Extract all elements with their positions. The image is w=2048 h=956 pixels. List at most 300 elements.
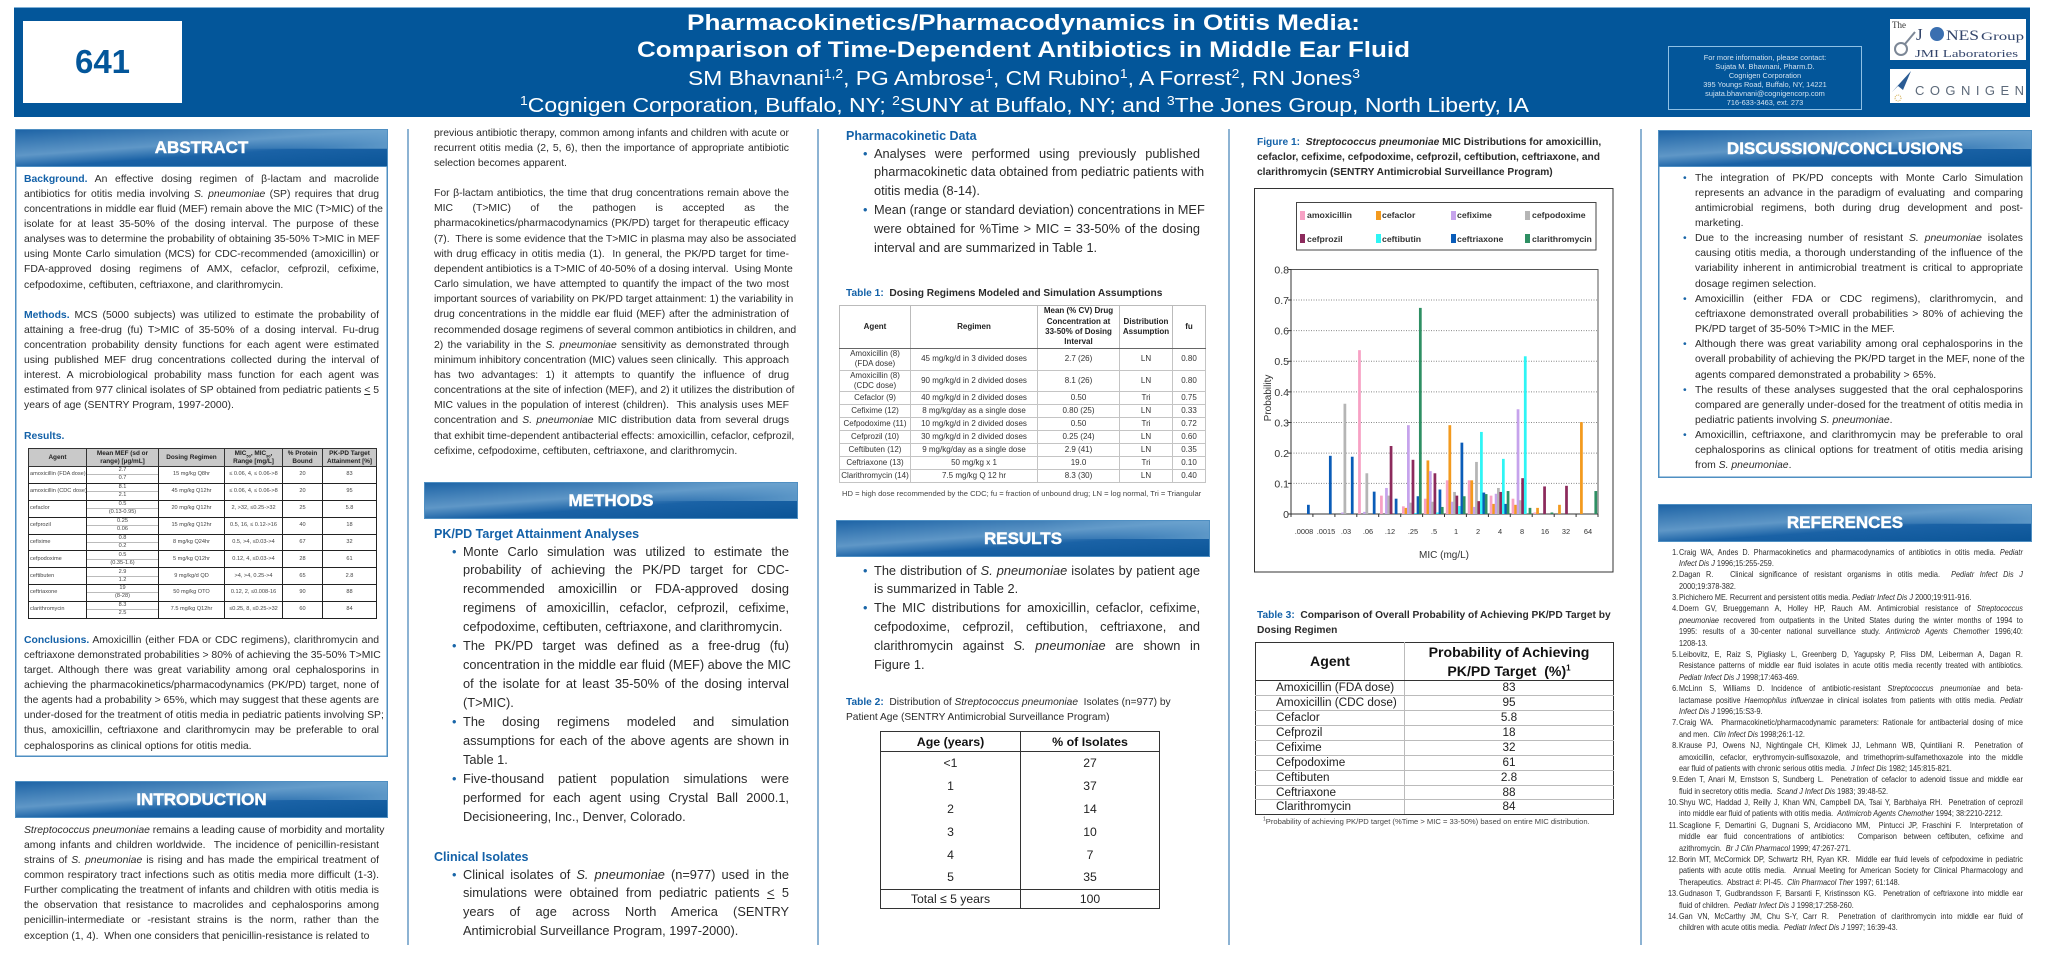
text: introduction: exception (1, 4). When one considers that penicillin-resistance is related to (24, 931, 369, 942)
text: conclusions: achieving the pharmacokinetics/pharmacodynamics (PK/PD) target, none of (24, 680, 379, 691)
list: clinical isolates (452, 866, 789, 938)
series: cefaclor (1405, 422, 1583, 514)
table 3: overall probability: Amoxicillin (CDC dose) (1276, 696, 1397, 709)
list: references: and men. Clin Infect Dis 1998;26:1-12. (1679, 729, 1805, 739)
table 1: dosing regimens: 0.40 (1181, 471, 1197, 480)
table: abstract results: 61 (346, 556, 353, 562)
logo: The Jones Group JMI Laboratories: JMI Laboratories (1915, 48, 2018, 60)
x axis labels: .0015 (1317, 527, 1335, 536)
table: abstract results: amoxicillin (CDC dose) (30, 488, 86, 494)
table 3: overall probability: Agent (1310, 653, 1350, 669)
table: abstract results: (0.13-0.95) (109, 509, 136, 515)
text: introduction continued: concentration and S. pneumoniae MIC distribution data from several drugs (434, 415, 789, 426)
list: conclusions: dosage regimen selection. (1695, 279, 1816, 290)
list: target attainment: probability of achieving the PK/PD target for CDC- (463, 562, 789, 577)
list: references: Infect Dis J 1996;15:255-259. (1679, 558, 1774, 568)
table 2: age distribution: 10 (1083, 825, 1097, 839)
table: abstract results: 2.7 (119, 467, 126, 473)
text: introduction continued: previous antibiotic therapy, common among infants and children with acute or (434, 128, 789, 138)
list: conclusions: Amoxicillin, ceftriaxone, and clarithromycin may be preferable to oral (1695, 430, 2023, 441)
table 1: dosing regimens: 50 mg/kg x 1 (951, 458, 997, 467)
text: conclusions (24, 634, 384, 752)
title and authors: 1 (985, 67, 993, 81)
caption: table 2: Table 2: Distribution of Streptococcus pneumoniae Isolates (n=977) by (846, 697, 1171, 708)
heading: references (1658, 504, 2032, 542)
contact box: For more information, please contact: (1704, 53, 1826, 62)
legend: cefixime (1457, 210, 1492, 220)
table: abstract results: clarithromycin (30, 606, 65, 612)
x axis labels: .03 (1341, 527, 1351, 536)
table 1: dosing regimens: 30 mg/kg/d in 2 divided doses (921, 432, 1027, 441)
y axis labels: 0.8 (1274, 264, 1289, 276)
legend: ceftibutin (1382, 234, 1421, 244)
list: references: Gan VN, McCarthy JM, Chu S-Y, Carr R. Penetration of clarithromycin into middle ear fluid of (1679, 911, 2023, 921)
table 1: dosing regimens: Cefpodoxime (11) (844, 419, 906, 428)
table: abstract results: MIC50, MIC90, Range [mg/L] (233, 450, 274, 464)
list: pharmacokinetic data (864, 146, 1205, 255)
caption: table 2: Patient Age (SENTRY Antimicrobial Surveillance Program) (846, 712, 1109, 723)
text: introduction: the observation that resistance to macrolides and cephalosporins among (24, 900, 379, 911)
table 1: dosing regimens (839, 305, 1206, 483)
panel: abstract (15, 129, 388, 757)
table: abstract results: 45 mg/kg Q12hr (171, 488, 212, 494)
subheading: pharmacokinetic data: Pharmacokinetic Data (846, 129, 977, 143)
title and authors: Pharmacokinetics/Pharmacodynamics in Otitis Media: (687, 10, 1360, 35)
chart: MIC distributions bar chart (1254, 188, 1614, 572)
table: abstract results: 0.7 (119, 475, 126, 481)
list: clinical isolates: simulations were obtained from pediatric patients < 5 (463, 885, 789, 900)
heading: results (836, 520, 1210, 557)
table 1: dosing regimens: 7.5 mg/kg Q 12 hr (942, 471, 1006, 480)
list: conclusions: overall probability of achieving the PK/PD target in the MEF, none of the (1695, 354, 2025, 365)
text: background: concentrations in middle ear fluid (MEF) remain above the MIC (T>MIC) of the (24, 204, 383, 215)
caption: table 3: Table 3: Comparison of Overall Probability of Achieving PK/PD Target by (1257, 610, 1611, 621)
text: methods: Methods. MCS (5000 subjects) was utilized to estimate the probability of (24, 310, 379, 320)
panel: introduction (15, 781, 388, 942)
table: abstract results: ≤0.25, 8, ≤0.25->32 (229, 606, 278, 612)
table: abstract results: cefixime (30, 539, 51, 545)
title and authors: 3 (1352, 67, 1360, 81)
table 1: dosing regimens: Distribution (1124, 317, 1168, 326)
list: pharmacokinetic data: pharmacokinetic data obtained from pediatric patients with (874, 164, 1204, 179)
heading: discussion/conclusions: DISCUSSION/CONCLUSIONS (1727, 139, 1963, 158)
table 3: overall probability: 32 (1502, 741, 1516, 754)
y axis labels: 0.6 (1274, 326, 1289, 338)
legend: cefprozil (1307, 234, 1343, 244)
table 1: dosing regimens: fu (1185, 322, 1193, 331)
table 1: dosing regimens: Tri (1141, 419, 1151, 428)
title and authors: 1,2 (824, 67, 843, 81)
series: cefprozil (1390, 446, 1568, 514)
poster number box (23, 21, 182, 103)
legend: clarithromycin (1532, 234, 1592, 244)
table 2: age distribution: 7 (1087, 848, 1093, 862)
table: abstract results: 95 (346, 488, 353, 494)
y axis labels: 0.1 (1274, 478, 1289, 490)
table 1: dosing regimens: Ceftriaxone (13) (846, 458, 904, 467)
text: introduction continued: minimum inhibitory concentration (MIC) values seen clinically. This approach (434, 355, 789, 366)
table: abstract results: 2.5 (119, 610, 126, 616)
table: abstract results: 65 (299, 573, 306, 579)
table: abstract results: 0.5 (119, 501, 126, 507)
table 2: age distribution: 3 (947, 825, 954, 839)
text: introduction continued: Carlo simulation, we have attempted to quantify the impact of the two most (434, 279, 789, 290)
table: abstract results: 5.8 (346, 505, 353, 511)
contact box: 716-633-3463, ext. 273 (1727, 98, 1803, 107)
table 1: dosing regimens: 0.25 (24) (1062, 432, 1095, 441)
list: target attainment: of the isolate for at least 35-50% of the dosing interval (463, 676, 789, 691)
title and authors: 3 (1167, 94, 1175, 108)
table: abstract results: 7.5 mg/kg Q12hr (171, 606, 212, 612)
logo: The Jones Group JMI Laboratories: The (1892, 20, 1906, 30)
table 1: dosing regimens: Mean (% CV) Drug (1044, 306, 1113, 315)
list: references: Borin MT, McCormick DP, Schwartz RH, Ryan KR. Middle ear fluid levels of cefpodoxime in pediatric (1679, 854, 2023, 864)
table: abstract results: cefaclor (30, 505, 50, 511)
table 1: dosing regimens: LN (1141, 432, 1151, 441)
legend: ceftriaxone (1457, 234, 1504, 244)
text: introduction: penicillin-intermediate or -resistant strains is the norm, rather than the (24, 915, 379, 926)
list: references: fluid of children. Pediatr Infect Dis J 1998;17:258-260. (1679, 900, 1854, 910)
series: cefixime (1341, 409, 1519, 514)
text: introduction continued: important sources of variability on PK/PD target attainment: 1) the variability in (434, 294, 793, 305)
contact box: 395 Youngs Road, Buffalo, NY, 14221 (1703, 80, 1827, 89)
list: conclusions: represents an advance in the paradigm of evaluating and comparing (1695, 188, 2023, 199)
list: results: The distribution of S. pneumoniae isolates by patient age (874, 562, 1200, 578)
y axis labels: 0.2 (1274, 448, 1289, 460)
table: abstract results: 40 (299, 522, 306, 528)
text: methods: attaining a free-drug (fu) T>MIC of 35-50% of a dosing interval. Fu-drug (24, 325, 379, 336)
footnote: table 1: HD = high dose recommended by the CDC; fu = fraction of unbound drug; LN = log normal, Tri = Triangular (842, 489, 1201, 498)
list: references: 1995: results of a 30-center national surveillance study. Antimicrob Agents Chemother 1996;40: (1679, 626, 2023, 636)
logo: The Jones Group JMI Laboratories: NES (1946, 28, 1979, 44)
legend (1296, 202, 1596, 250)
list: references: Dagan R. Clinical significance of resistant organisms in otitis media. Pediatr Infect Dis J (1679, 569, 2023, 579)
list: conclusions: marketing. (1695, 218, 1744, 229)
text: methods (24, 310, 380, 411)
text: introduction continued: pharmacokinetics/pharmacodynamics (PK/PD) target for therapeutic efficacy (434, 218, 789, 229)
list: conclusions: Due to the increasing number of resistant S. pneumoniae isolates (1695, 233, 2023, 244)
x axis labels: 1 (1454, 527, 1458, 536)
table 1: dosing regimens: 19.0 (1071, 458, 1086, 467)
contact box: sujata.bhavnani@cognigencorp.com (1705, 89, 1825, 98)
table: abstract results: 0.25 (117, 518, 128, 524)
table: abstract results: (8-28) (115, 593, 130, 599)
list: references: pneumoniae recovered from outpatients in the United States during the winter months of 1994 to (1679, 615, 2023, 625)
title and authors: Comparison of Time-Dependent Antibiotics in Middle Ear Fluid (637, 37, 1410, 62)
text: background: Background. An effective dosing regimen of β-lactam and macrolide (24, 174, 379, 184)
list: conclusions: ceftriaxone demonstrated overall probabilities > 80% of achieving the (1695, 309, 2023, 320)
list: results: The MIC distributions for amoxicillin, cefaclor, cefixime, (874, 600, 1200, 615)
list: references: fluid in secretory otitis media. Scand J Infect Dis 1983; 39:48-52. (1679, 786, 1888, 796)
y axis labels: 0.5 (1274, 356, 1289, 368)
table: abstract results: 20 mg/kg Q12hr (171, 505, 212, 511)
table: abstract results: Dosing Regimen (166, 454, 217, 460)
table: abstract results: 0.5, >4, ≤0.03->4 (232, 539, 275, 545)
table: abstract results: % Protein Bound (288, 450, 317, 464)
table 1: dosing regimens: LN (1141, 406, 1151, 415)
list: references: Scaglione F, Demartini G, Dugnani S, Arcidiacono MM, Pintucci JP, Fraschini F. Interpretation of (1679, 820, 2023, 830)
panel: references: 9. (1672, 774, 1678, 784)
list: target attainment: Monte Carlo simulation was utilized to estimate the (463, 544, 789, 558)
x axis labels: 16 (1541, 527, 1549, 536)
text: introduction continued (434, 128, 796, 457)
table 3: overall probability: 5.8 (1501, 711, 1517, 724)
text: conclusions: cephalosporins as clinical options for otitis media. (24, 741, 252, 752)
text: introduction: among infants and children worldwide. The incidence of penicillin-resistant (24, 840, 379, 851)
table 1: dosing regimens: 0.80 (1181, 376, 1197, 385)
figure caption: figure 1 (1257, 136, 1601, 178)
list: pharmacokinetic data: were obtained for %Time > MIC = 33-50% of the dosing (874, 221, 1200, 236)
table: abstract results: 2.8 (346, 573, 353, 579)
table 1: dosing regimens: 9 mg/kg/day as a single dose (922, 445, 1026, 454)
table: abstract results: 5 mg/kg Q12hr (173, 556, 210, 562)
table 3: overall probability: Cefixime (1276, 741, 1322, 754)
caption: table 3 (1257, 610, 1611, 636)
list: references: amoxicillin, cefaclor, erythromycin-sulfisoxazole, and trimethoprim-sulfamethoxazole into the middle (1679, 752, 2023, 762)
table 3: overall probability: PK/PD Target (%)1 (1447, 663, 1571, 679)
caption: table 3: Dosing Regimen (1257, 625, 1337, 636)
text: conclusions: Conclusions. Amoxicillin (either FDA or CDC regimens), clarithromycin and (24, 634, 379, 646)
table: abstract results: >4, >4, 0.25->4 (234, 573, 273, 579)
table 3: overall probability: Cefprozil (1276, 726, 1322, 739)
list: target attainment: (T>MIC). (463, 695, 514, 710)
list: references: Leibovitz, E, Raiz S, Pigliasky L, Greenberg D, Yagupsky P, Fliss DM, Leiberman A, Dagan R. (1679, 649, 2023, 659)
text: background: FDA-approved dosing regimens of AMX, cefaclor, cefprozil, cefixime, (24, 264, 379, 275)
panel: references: 11. (1669, 820, 1678, 830)
list: references: 2000;19:378-382. (1679, 581, 1736, 591)
panel: references: 6. (1672, 683, 1678, 693)
table: abstract results: Mean MEF (sd or range) [µg/mL] (97, 450, 148, 464)
list: references: Shyu WC, Haddad J, Reilly J, Khan WN, Campbell DA, Tsai Y, Barbhaiya RH. Penetration of ceprozil (1679, 797, 2023, 807)
table: abstract results: 2.1 (119, 492, 126, 498)
table 1: dosing regimens: 0.72 (1181, 419, 1197, 428)
list: references: Krause PJ, Owens NJ, Nightingale CH, Klimek JJ, Lehmann WB, Quintiliani R. Penetration of (1679, 740, 2023, 750)
table 1: dosing regimens: LN (1141, 471, 1151, 480)
text: background: cefpodoxime, ceftibuten, ceftriaxone, and clarithromycin. (24, 280, 283, 291)
header banner (14, 7, 2030, 117)
heading: methods (424, 482, 798, 519)
table 1: dosing regimens: 8 mg/kg/day as a single dose (922, 406, 1026, 415)
table 2: age distribution: % of Isolates (1052, 734, 1128, 748)
text: introduction: Further complicating the treatment of infants and children with otitis media is (24, 885, 379, 896)
x axis labels: 64 (1584, 527, 1592, 536)
logo: Cognigen (1890, 69, 2026, 103)
list: conclusions: The integration of PK/PD concepts with Monte Carlo Simulation (1695, 172, 2023, 184)
table: abstract results: 9 mg/kg/d QD (174, 573, 209, 579)
x axis labels: .0008 (1295, 527, 1313, 536)
table 1: dosing regimens: Amoxicillin (8) (850, 349, 900, 358)
title and authors: 2 (1232, 67, 1239, 81)
table: abstract results: (0.35-1.6) (110, 560, 135, 566)
table 1: dosing regimens: Cefixime (12) (851, 406, 899, 415)
text: introduction continued: with drug efficacy in otitis media (1). In general, the PK/PD target for time- (434, 249, 789, 260)
heading: discussion/conclusions (1658, 130, 2032, 167)
table 3: overall probability: Probability of Achieving (1429, 644, 1589, 660)
heading: abstract: ABSTRACT (155, 138, 248, 157)
text: conclusions: under-dosed for the treatment of otitis media in pediatric patients involving SP; (24, 710, 384, 721)
table 1: dosing regimens: 45 mg/kg/d in 3 divided doses (921, 354, 1027, 363)
table 1: dosing regimens: 0.80 (1181, 354, 1197, 363)
list: results: Figure 1. (874, 657, 925, 672)
table: abstract results (28, 448, 377, 619)
heading: introduction (15, 781, 388, 818)
series: amoxicillin (1358, 350, 1536, 514)
table 1: dosing regimens: 8.1 (26) (1065, 376, 1092, 385)
figure caption: figure 1: Figure 1: Streptococcus pneumoniae MIC Distributions for amoxicillin, (1257, 136, 1601, 148)
table: abstract results: 50 mg/kg OTO (173, 589, 210, 595)
heading: methods: METHODS (568, 491, 654, 510)
table: abstract results: 67 (299, 539, 306, 545)
series: cefpodoxime (1344, 404, 1522, 514)
panel: pharmacokinetic data (839, 129, 1206, 498)
table 3: overall probability: 61 (1502, 756, 1516, 769)
list: conclusions (1683, 172, 2025, 471)
title and authors: 1 (520, 94, 528, 108)
table 1: dosing regimens: 0.10 (1181, 458, 1197, 467)
panel: references: 12. (1668, 854, 1678, 864)
table 3: overall probability: 95 (1502, 696, 1516, 709)
list: pharmacokinetic data: otitis media (8-14). (874, 183, 980, 198)
title and authors: SUNY at Buffalo, NY; and (900, 94, 1167, 117)
table 3: overall probability: 88 (1502, 786, 1516, 799)
legend: cefpodoxime (1532, 210, 1586, 220)
text: methods: estimated from 977 clinical isolates of SP obtained from pediatric patients < 5 (24, 385, 379, 396)
table 3: overall probability: Amoxicillin (FDA dose) (1276, 681, 1394, 694)
list: target attainment (452, 544, 791, 824)
y axis labels (1274, 264, 1289, 521)
table: abstract results: 0.8 (119, 535, 126, 541)
table: abstract results: amoxicillin (FDA dose) (30, 471, 86, 477)
bars (1307, 308, 1597, 514)
text: conclusions: the agents had a probability > 65%, which may suggest that these agents are (24, 695, 379, 706)
y axis labels: 0.7 (1274, 295, 1289, 307)
list: conclusions: compared are generally under-dosed for the treatment of otitis media in (1695, 400, 2023, 411)
title and authors: , A Forrest (1128, 67, 1232, 90)
table: abstract results: 8.1 (119, 484, 126, 490)
panel: references: 13. (1668, 888, 1678, 898)
table: abstract results: 15 mg/kg Q8hr (173, 471, 210, 477)
panel: references: 4. (1672, 603, 1678, 613)
list: target attainment: concentration in the middle ear fluid (MEF) above the MIC (463, 657, 791, 672)
text: introduction continued: MIC (T>MIC) of the pathogen is accepted as the (434, 203, 789, 214)
list: conclusions: variability inherent in antimicrobial treatment is critical to appropriate (1695, 263, 2023, 274)
table 1: dosing regimens: Agent (864, 322, 886, 331)
y axis title: Probability (1263, 375, 1274, 421)
text: background: isolate for at least 35-50% of the dosing interval. The purpose of these (24, 219, 379, 230)
table 1: dosing regimens: 10 mg/kg/d in 2 divided doses (921, 419, 1027, 428)
title and authors: , PG Ambrose (843, 67, 985, 90)
x axis labels: .12 (1385, 527, 1395, 536)
footnote: table 3: 1Probability of achieving PK/PD target (%Time > MIC = 33-50%) based on entire MIC distribution. (1263, 816, 1590, 826)
table: abstract results: 0.2 (119, 543, 126, 549)
x axis labels: 4 (1498, 527, 1502, 536)
list: references: Eden T, Anari M, Ernstson S, Sundberg L. Penetration of cefaclor to adenoid tissue and middle ear (1679, 774, 2023, 784)
table: abstract results: 84 (346, 606, 353, 612)
panel: references: 2. (1672, 569, 1678, 579)
text: background: antibiotics for otitis media involving S. pneumoniae (SP) requires that drug (24, 189, 379, 200)
table: abstract results: ≤ 0.06, 4, ≤ 0.06->8 (229, 488, 278, 494)
x axis labels: .5 (1431, 527, 1437, 536)
text: introduction continued: that exhibit time-dependent antibacterial effects: amoxicillin, cefaclor, cefprozil, (434, 431, 794, 442)
table 1: dosing regimens: (CDC dose) (854, 381, 896, 390)
x axis labels: 8 (1520, 527, 1524, 536)
contact box: Sujata M. Bhavnani, Pharm.D. (1715, 62, 1815, 71)
table: abstract results: 19 (119, 585, 126, 591)
list: references: patients with acute otitis media. Annual Meeting for American Society for Clinical Pharmacology and (1679, 865, 2023, 875)
poster number box: 641 (75, 43, 130, 80)
logo: Cognigen: COGNIGEN (1915, 83, 2024, 98)
list: references: Resistance patterns of middle ear fluid isolates in acute otitis media recently treated with antibiotics. (1679, 660, 2023, 670)
list: clinical isolates: Antimicrobial Surveillance Program, 1997-2000). (463, 923, 738, 938)
text: conclusions: ceftriaxone demonstrated probabilities > 80% of achieving the 35-50% T>MIC (24, 650, 381, 661)
x axis labels: 32 (1562, 527, 1570, 536)
table: abstract results: ceftibuten (30, 573, 54, 579)
panel: references: 7. (1672, 717, 1678, 727)
legend: cefaclor (1382, 210, 1416, 220)
table 3: overall probability: Clarithromycin (1276, 800, 1351, 813)
table: abstract results: 28 (299, 556, 306, 562)
list: references: Pichichero ME. Recurrent and persistent otitis media. Pediatr Infect Dis J 2000;19:911-916. (1679, 592, 1971, 602)
table: abstract results: 18 (346, 522, 353, 528)
table 1: dosing regimens: Cefprozil (10) (851, 432, 899, 441)
figure caption: figure 1: cefaclor, cefixime, cefpodoxime, cefprozil, ceftibution, ceftriaxone, and (1257, 152, 1600, 163)
list: references: McLinn S, Williams D. Incidence of antibiotic-resistant Streptococcus pneumoniae and beta- (1679, 683, 2023, 693)
list: pharmacokinetic data: interval and are summarized in Table 1. (874, 240, 1097, 255)
text: introduction: Streptococcus pneumoniae remains a leading cause of morbidity and mortality (24, 824, 384, 836)
list: conclusions: cephalosporins as clinical options for treatment of otitis media arising (1695, 445, 2023, 456)
text: introduction continued: cefixime, cefpodoxime, ceftibuten, ceftriaxone, and clarithromycin. (434, 446, 737, 457)
panel: references (1658, 504, 2032, 932)
table: abstract results: 1.2 (119, 577, 126, 583)
table: abstract results: 60 (299, 606, 306, 612)
table 1: dosing regimens: Clarithromycin (14) (841, 471, 909, 480)
text: background (24, 174, 383, 291)
list: conclusions: Amoxicillin (either FDA or CDC regimens), clarithromycin, and (1695, 294, 2023, 305)
table 2: age distribution: 5 (947, 870, 954, 884)
table 1: dosing regimens: 40 mg/kg/d in 2 divided doses (921, 393, 1027, 402)
table 1: dosing regimens: 33-50% of Dosing (1045, 327, 1112, 336)
series: ceftibutin (1414, 356, 1527, 514)
y axis labels: 0 (1283, 509, 1289, 521)
x axis title: MIC (mg/L) (1419, 550, 1469, 561)
table: abstract results: 88 (346, 589, 353, 595)
text: methods: years of age (SENTRY Program, 1997-2000). (24, 400, 234, 411)
table 2: age distribution (880, 731, 1160, 909)
text: introduction continued: has two advantages: 1) it attempts to quantify the influence of drug (434, 370, 789, 381)
list: target attainment: Table 1. (463, 752, 508, 767)
table 1: dosing regimens: 8.3 (30) (1065, 471, 1092, 480)
table 1: dosing regimens: Interval (1064, 337, 1093, 346)
list: references: into middle ear fluid of patients with otitis media. Antimicrob Agents Chemother 1994; 38:2210-2212. (1679, 808, 2003, 818)
list: target attainment: The dosing regimens modeled and simulation (463, 714, 789, 729)
table 1: dosing regimens: Tri (1141, 458, 1151, 467)
table: abstract results: PK-PD Target Attainment [%] (327, 450, 372, 464)
list: references: Pediatr Infect Dis J 1998;17:463-469. (1679, 672, 1799, 682)
text: methods: concentration probability density functions for each agent were estimated (24, 340, 379, 351)
table 1: dosing regimens: 90 mg/kg/d in 2 divided doses (921, 376, 1027, 385)
text: methods: interest. A microbiological probability mass function for each agent was (24, 370, 379, 381)
list: conclusions: pediatric patients involving S. pneumoniae. (1695, 415, 1893, 426)
title and authors: 2 (892, 94, 900, 108)
panel: table 3 (1255, 610, 1614, 826)
contact box (1668, 46, 1862, 110)
text: conclusions: target. Although there was great variability among oral cephalosporins in (24, 665, 379, 676)
table 2: age distribution: 100 (1080, 892, 1100, 906)
table: abstract results: cefpodoxime (30, 556, 62, 562)
text: background: using Monte Carlo simulation (MCS) for CDC-recommended (amoxicillin) or (24, 249, 379, 260)
list: references: Infect Dis J 1996;15:S3-9. (1679, 706, 1763, 716)
heading: references: REFERENCES (1787, 513, 1903, 532)
